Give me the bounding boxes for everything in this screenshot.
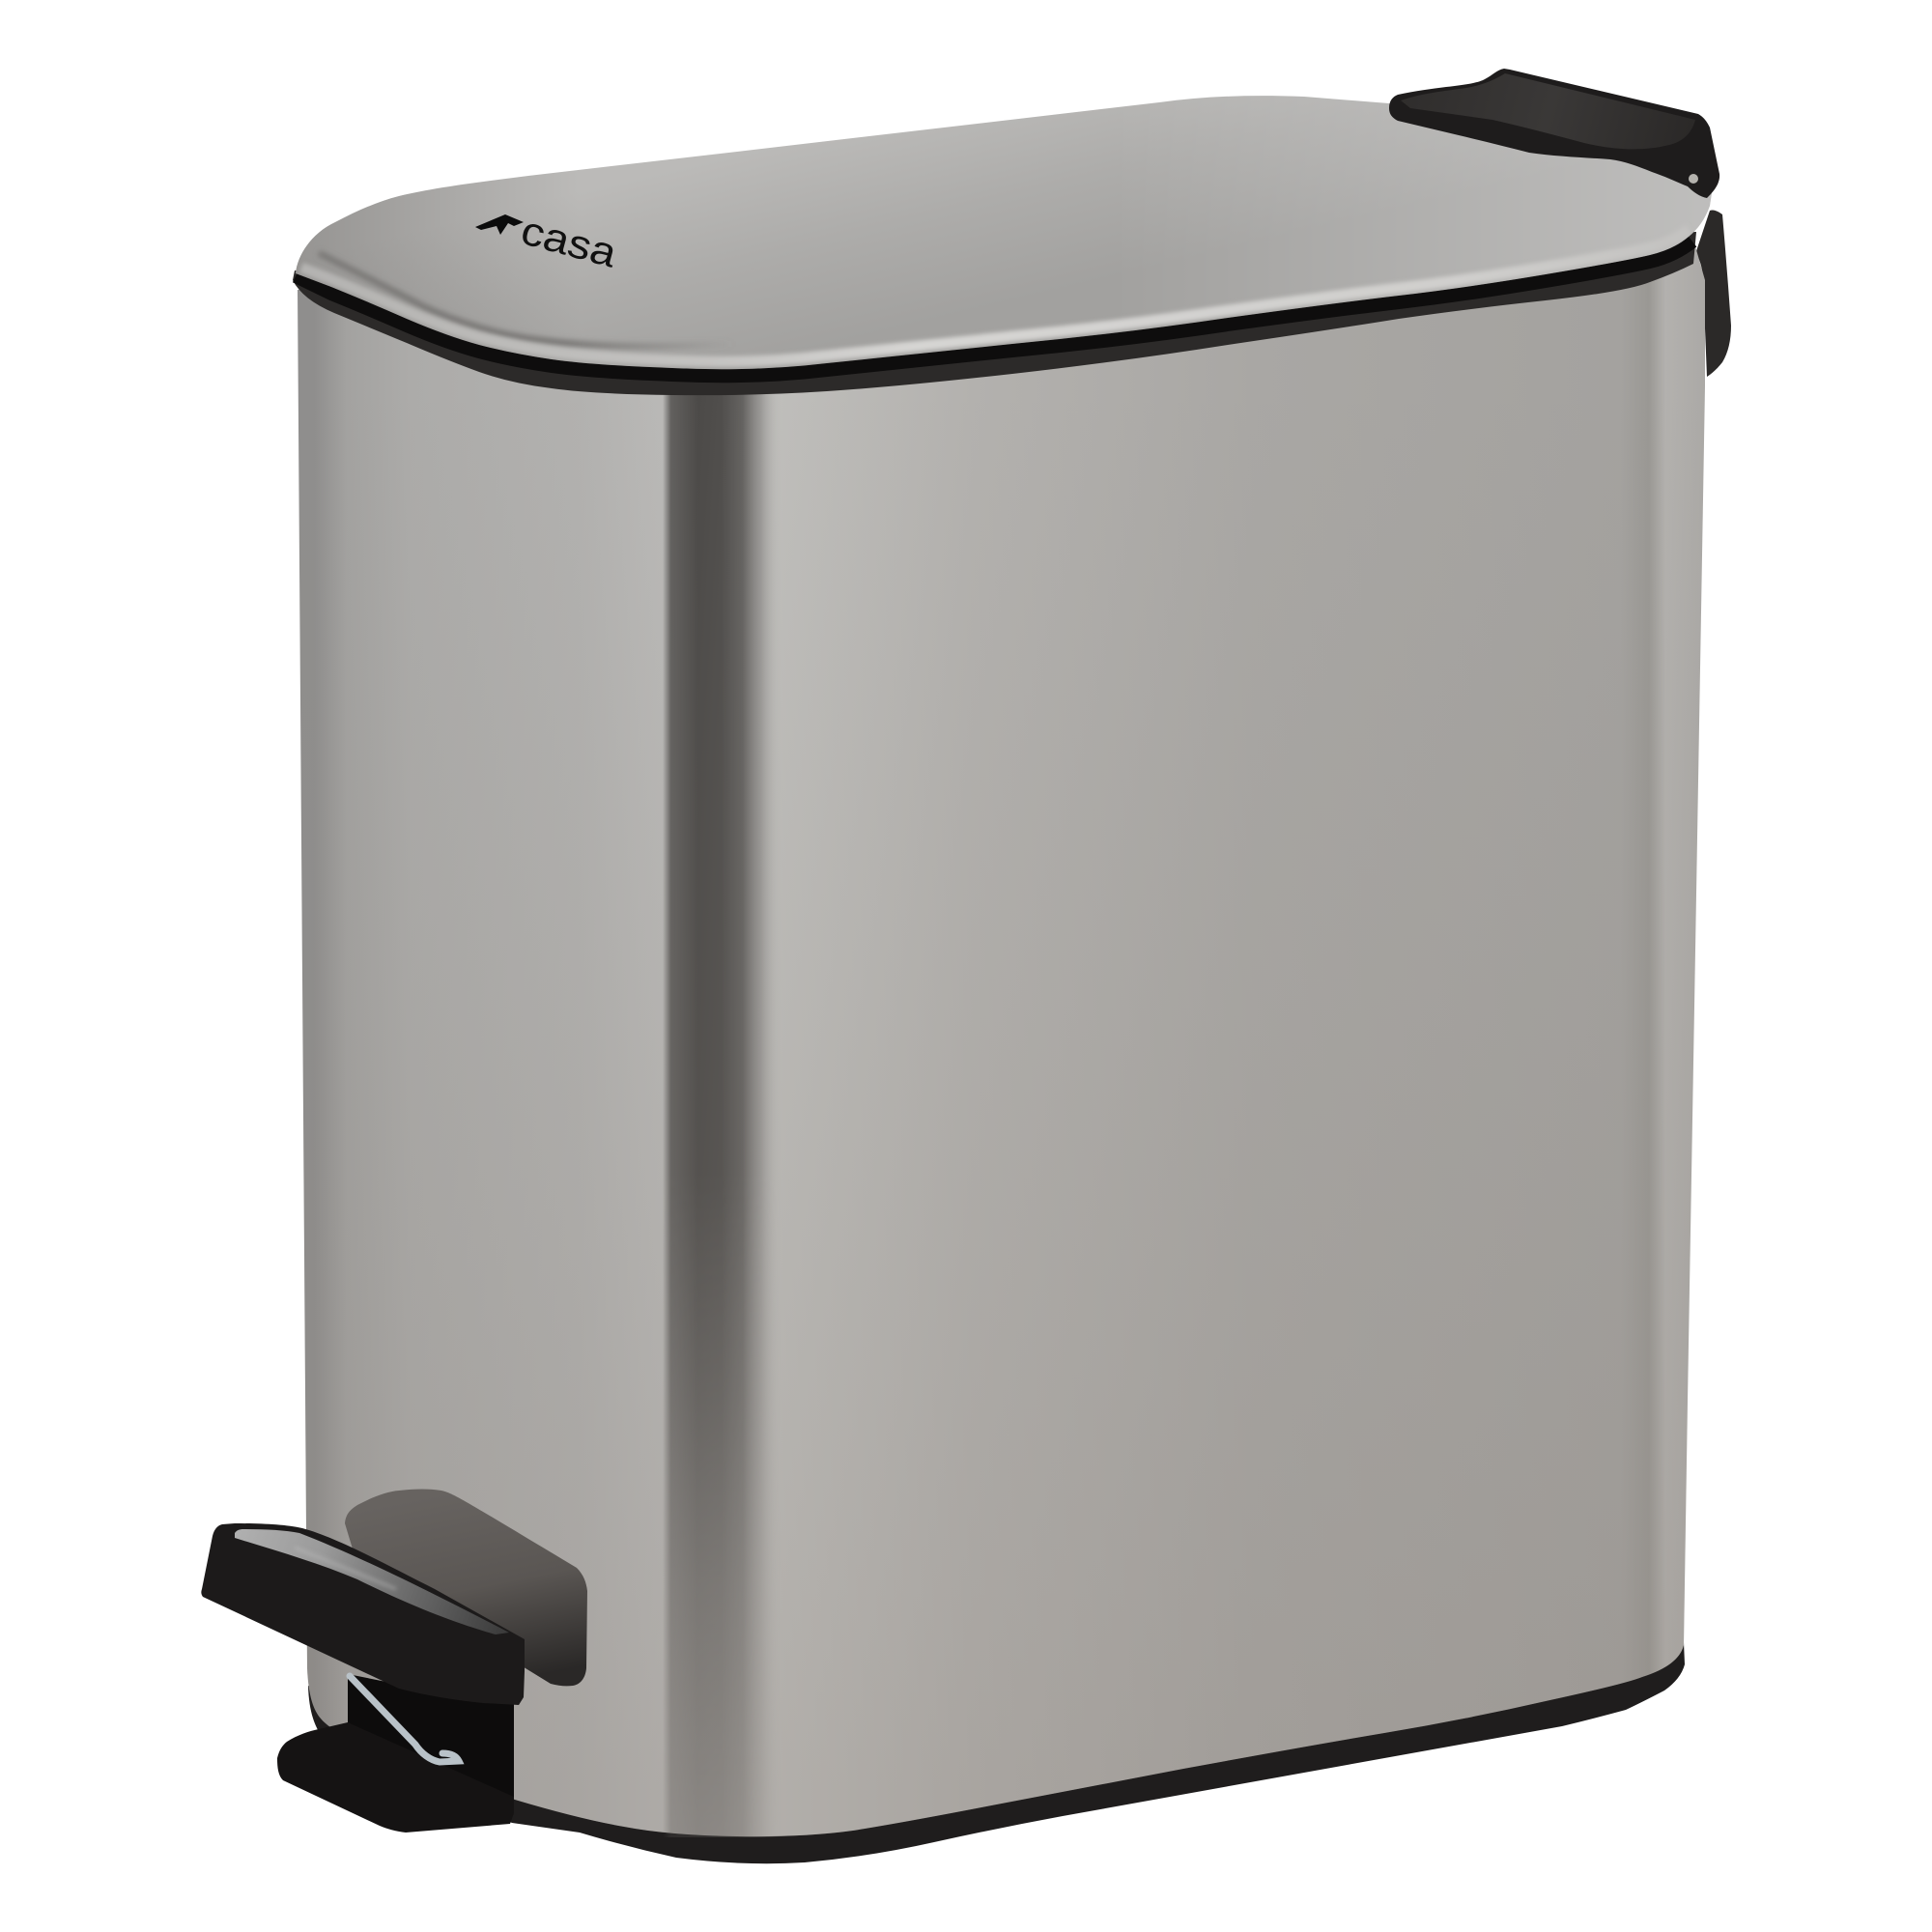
pedal steel inlay [235,1529,509,1634]
body steel surface [298,246,1705,1836]
rim highlight [301,229,1689,361]
top lid handle [1389,69,1719,198]
handle top face [1401,73,1695,149]
pedal stand [348,1674,514,1813]
rim seal [293,232,1696,395]
logo mark [475,214,524,235]
dark corner reflection band [663,367,781,1837]
illustration: stainless steel pedal bin [201,69,1731,1864]
pedal arm [201,1523,525,1705]
pedal foot [277,1722,514,1833]
rear hinge bracket [1695,211,1731,377]
warm lower tint [298,246,1705,1836]
handle rivet [1689,174,1698,184]
pedal spring [350,1676,459,1762]
foot pedal assembly [201,1490,587,1833]
logo: Casa [475,207,622,276]
handle body [1389,69,1719,198]
dark rim crease [319,253,734,346]
pedal inlay stripe [295,1548,396,1589]
pedal back plate [345,1490,587,1686]
bottom base ring [308,1642,1685,1863]
bin body [298,246,1705,1837]
lid shading overlays [290,87,1719,377]
logo wordmark: casa [517,207,622,276]
lid [290,87,1719,377]
lid surface [296,96,1712,369]
black seal line [296,242,1692,376]
